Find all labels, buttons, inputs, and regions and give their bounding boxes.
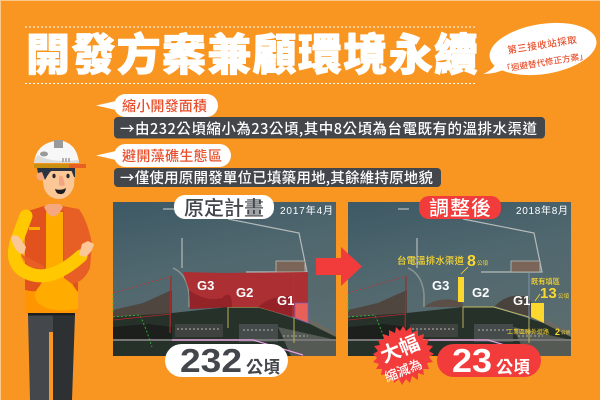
label G1: G1	[513, 293, 530, 308]
road label: 工業區聯外道路	[507, 327, 549, 336]
date: 2017年4月	[280, 204, 333, 217]
badge: greatly reduced to	[373, 326, 434, 386]
channel label: 公頃	[477, 259, 489, 267]
bar: land use text: →僅使用原開發單位已填築用地,其餘維持原地貌	[120, 167, 434, 188]
bubble: reduce development area	[96, 94, 218, 117]
label G3: G3	[432, 278, 449, 293]
channel label: 8	[467, 253, 476, 270]
yellow reclaimed area marker	[531, 303, 544, 323]
callout: LNG terminal alternative	[483, 16, 600, 82]
reclaimed area label: 既有填區	[531, 277, 560, 287]
bar: area reduced text: →由232公頃縮小為23公頃,其中8公頃為台電既有的溫排水渠道	[120, 118, 538, 139]
road label: 公頃	[561, 329, 570, 336]
badge: greatly reduced to: 大幅	[375, 327, 423, 369]
label G2: G2	[236, 285, 253, 300]
stat: 232 hectares: 公頃	[246, 353, 280, 378]
arms	[11, 216, 94, 276]
stat: 23 hectares: 23	[452, 342, 492, 379]
stat: 232 hectares	[165, 342, 288, 379]
heading: adjusted plan: 調整後	[429, 192, 491, 221]
callout: LNG terminal alternative: 第三接收站採取	[506, 32, 578, 57]
channel label: 台電溫排水渠道	[397, 253, 464, 267]
title: 開發方案兼顧環境永續	[26, 19, 478, 83]
reclaimed area label: 13	[540, 285, 557, 302]
panel: adjusted plan map	[348, 202, 571, 356]
darker red shading	[189, 290, 292, 317]
arrow: red	[316, 247, 362, 286]
stat: 23 hectares	[437, 342, 541, 379]
label G3: G3	[197, 278, 214, 293]
callout: LNG terminal alternative: 「迴避替代修正方案」	[502, 50, 588, 75]
channel label	[397, 253, 489, 274]
reclaimed area label	[531, 277, 570, 302]
light red G1 block	[295, 303, 308, 323]
pants	[28, 313, 75, 400]
heading: original plan: 原定計畫	[184, 192, 264, 221]
reclaimed area label: 公頃	[558, 292, 570, 300]
label G1: G1	[277, 293, 294, 308]
bubble: avoid algal reef	[96, 144, 231, 167]
red development area G1 G2 G3	[183, 272, 308, 323]
badge: greatly reduced to: 縮減為	[381, 353, 425, 386]
stat: 23 hectares: 公頃	[496, 353, 530, 378]
head	[36, 168, 75, 199]
road label	[507, 327, 570, 337]
yellow channel marker	[458, 277, 464, 302]
bubble: reduce development area: 縮小開發面積	[122, 96, 207, 116]
illustration: construction worker	[11, 140, 94, 400]
vest and shirt	[20, 204, 92, 313]
road label: 2	[555, 327, 560, 337]
stat: 232 hectares: 232	[180, 342, 242, 379]
panel: original plan map	[113, 202, 336, 356]
bubble: avoid algal reef: 避開藻礁生態區	[122, 146, 222, 166]
label G2: G2	[472, 285, 489, 300]
icon: hard hat	[34, 140, 86, 168]
date: 2018年8月	[516, 204, 568, 217]
